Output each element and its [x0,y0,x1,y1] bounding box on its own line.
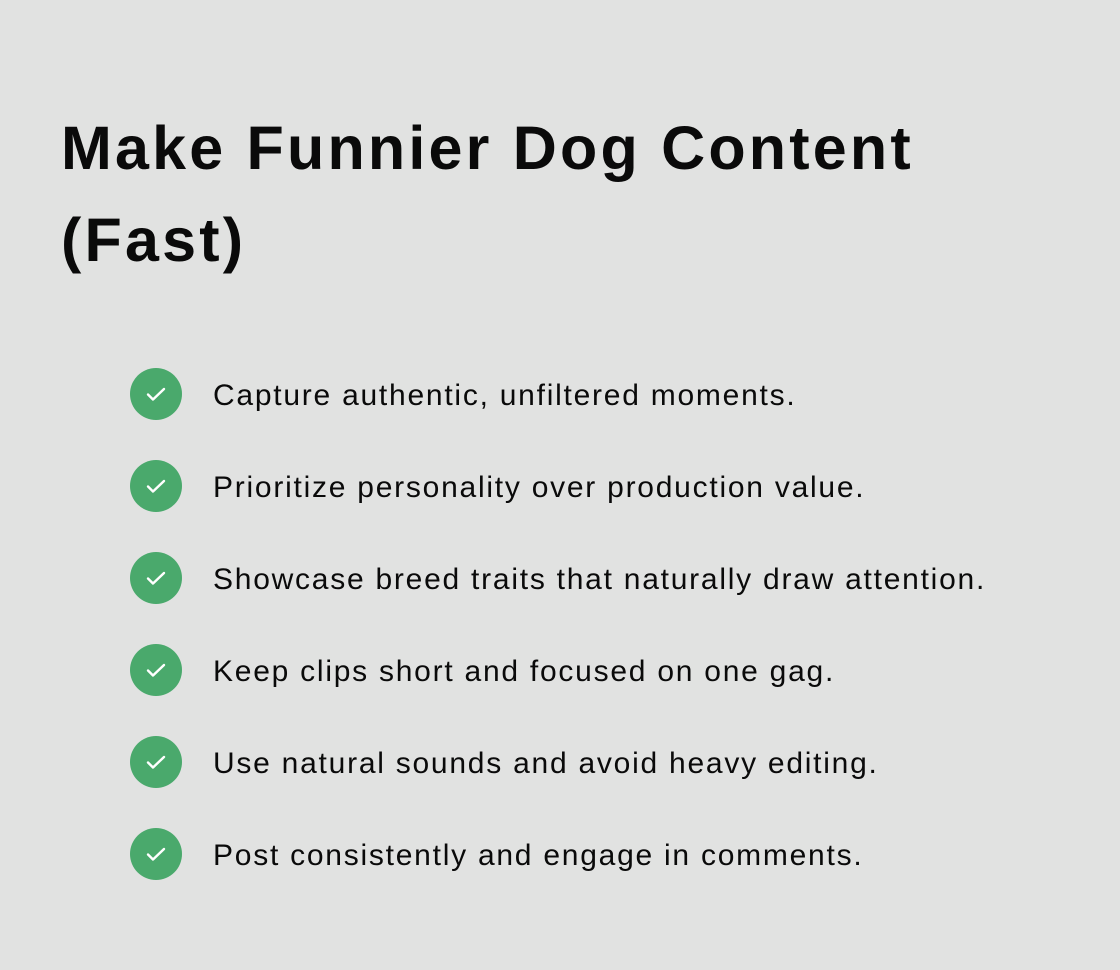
item 1: Capture authentic, unfiltered moments. [213,379,796,412]
item 6: Post consistently and engage in comments. [213,839,863,872]
item 5 [130,736,879,788]
item 1 [130,368,796,420]
item 5: Use natural sounds and avoid heavy editing. [213,747,879,780]
item 3: Showcase breed traits that naturally draw attention. [213,563,986,596]
item 4 [130,644,835,696]
item 2 [130,460,865,512]
checklist [130,368,986,880]
item 2: Prioritize personality over production value. [213,471,865,504]
title: Make Funnier Dog Content [61,114,914,182]
title: (Fast) [61,206,246,274]
item 6 [130,828,863,880]
item 3 [130,552,986,604]
title [61,114,914,274]
item 4: Keep clips short and focused on one gag. [213,655,835,688]
